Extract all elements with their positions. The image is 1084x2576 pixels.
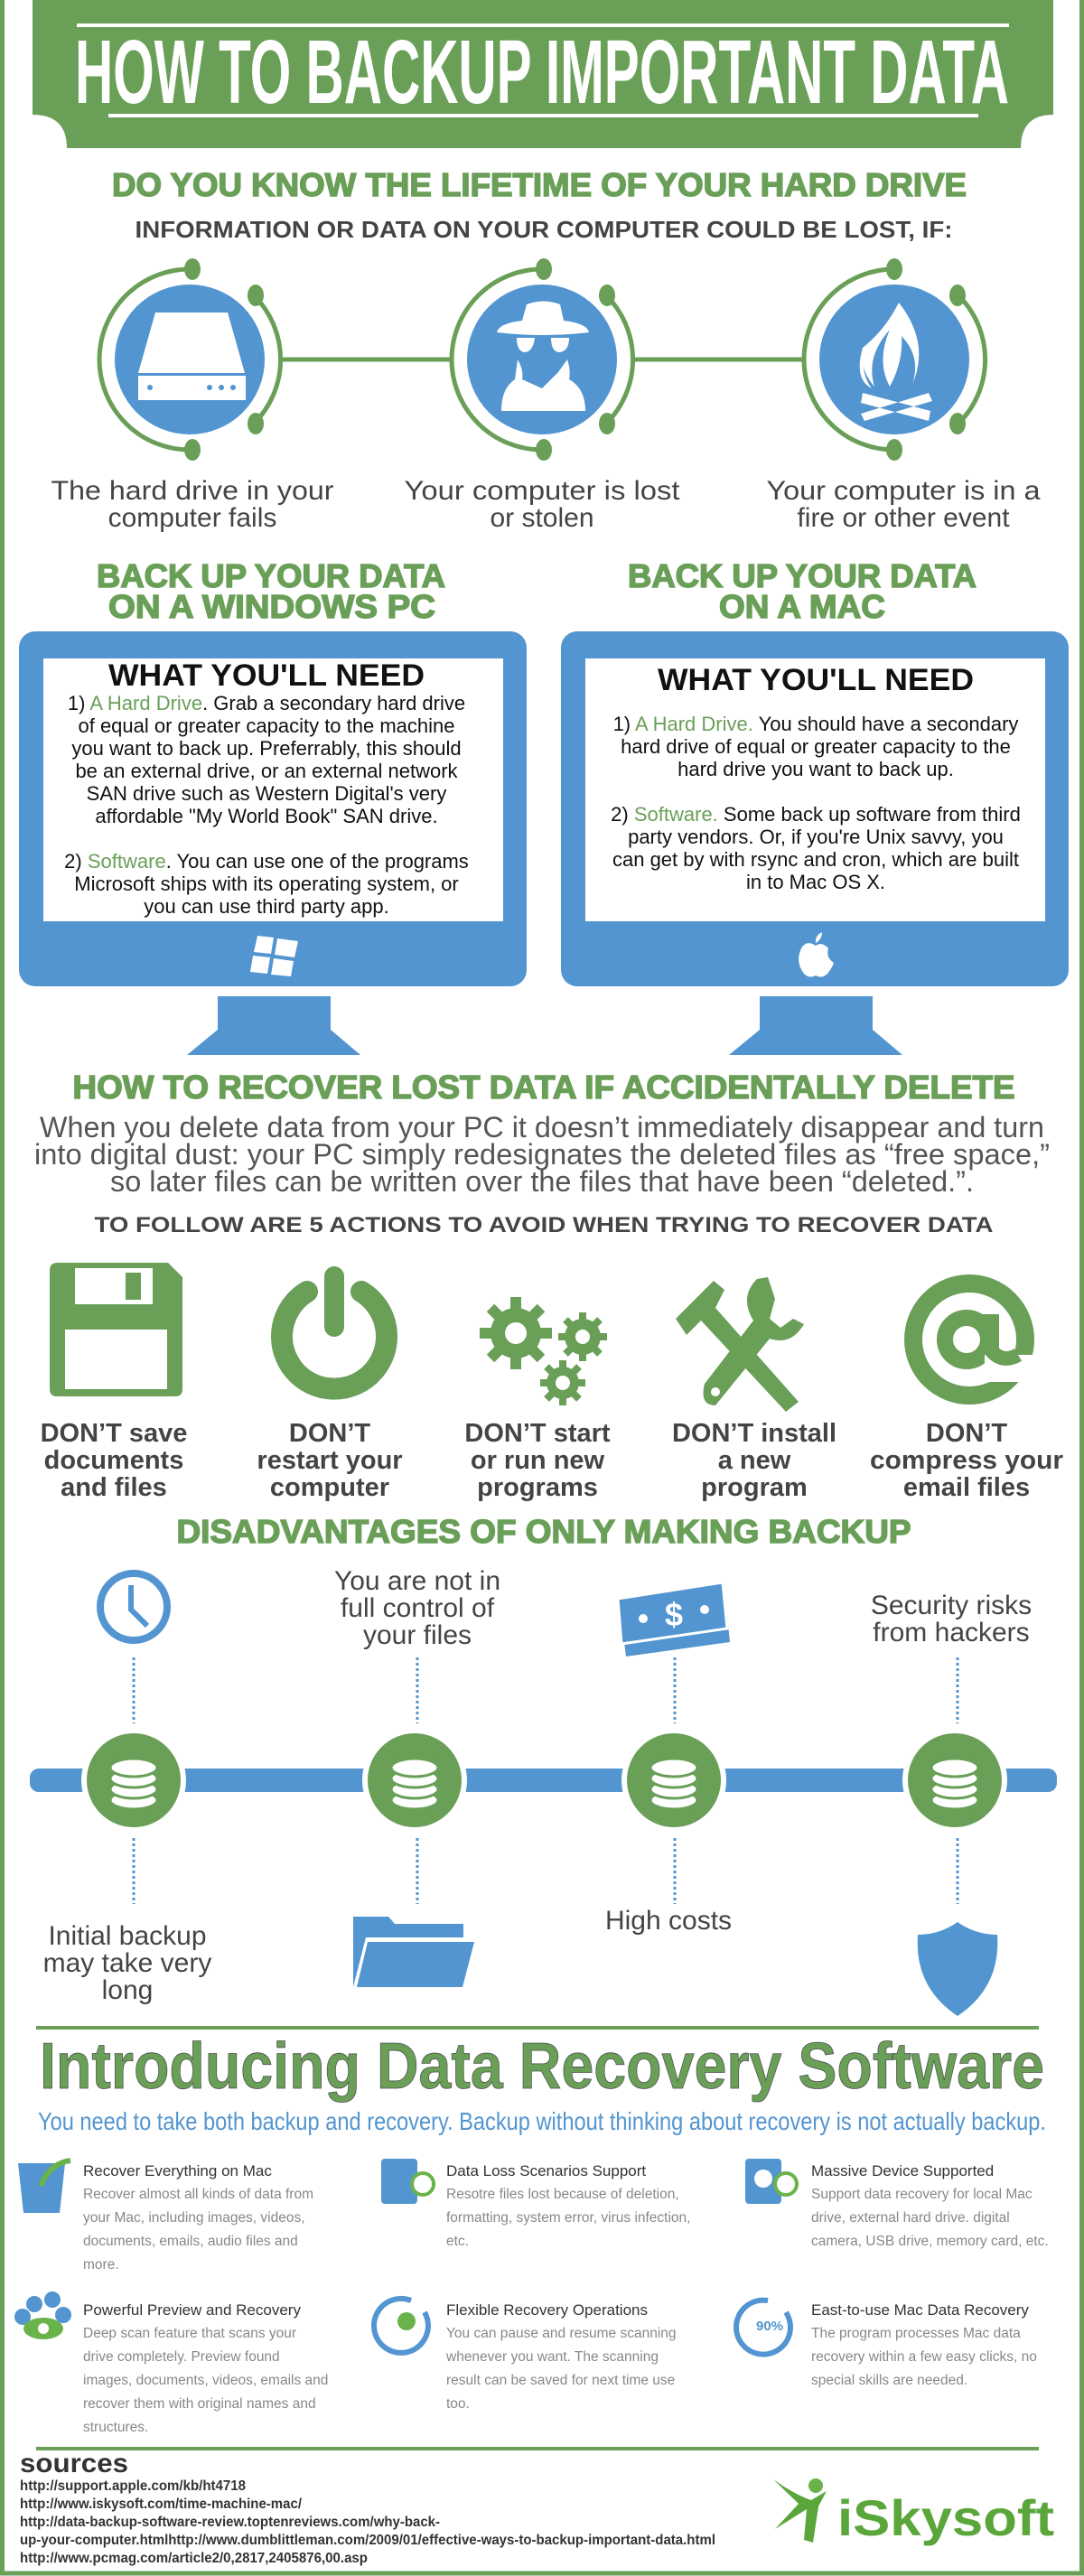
heading: disadvantages: DISADVANTAGES OF ONLY MAKING BACKUP: [177, 1513, 911, 1550]
icon: folder: [353, 1917, 474, 1987]
text: mac needs: [611, 663, 1021, 893]
icon: money: $: [665, 1596, 683, 1633]
labels: actions: DON’T: [926, 1419, 1007, 1448]
sources: http://www.pcmag.com/article2/0,2817,2405876,00.asp: [20, 2551, 368, 2566]
feature: recover everything: your Mac, including images, videos,: [83, 2210, 305, 2226]
labels: actions: [41, 1419, 1063, 1502]
feature: easy: [736, 2301, 1037, 2388]
feature: recover everything: documents, emails, audio files and: [83, 2234, 298, 2249]
feature: flexible: You can pause and resume scanning: [446, 2326, 677, 2341]
feature: preview: images, documents, videos, emails and: [83, 2373, 328, 2388]
heading: windows: [97, 557, 445, 625]
sources: [20, 2449, 715, 2566]
icon: power: [282, 1266, 387, 1389]
labels: actions: and files: [61, 1473, 167, 1502]
feature: preview: structures.: [83, 2420, 148, 2435]
sources: up-your-computer.htmlhttp://www.dumblittleman.com/2009/01/effective-ways-to-backup-important-data.html: [20, 2533, 715, 2548]
monitor: windows: [19, 631, 527, 1055]
labels: actions: compress your: [870, 1446, 1063, 1475]
labels: disadvantages: You are not in: [334, 1566, 500, 1596]
feature: data loss: Data Loss Scenarios Support: [446, 2162, 646, 2179]
labels: actions: a new: [718, 1446, 791, 1475]
title banner: [33, 0, 1053, 148]
labels: actions: DON’T start: [464, 1419, 611, 1448]
labels: actions: computer: [270, 1473, 389, 1502]
feature: data loss: Resotre files lost because of deletion,: [446, 2187, 679, 2202]
labels: actions: DON’T save: [41, 1419, 187, 1448]
text: windows needs: SAN drive such as Western Digital's very: [87, 782, 446, 805]
labels: disadvantages: Security risks: [871, 1591, 1032, 1620]
text: windows needs: [64, 658, 469, 918]
heading: mac: [628, 557, 977, 625]
paragraph: recover: into digital dust: your PC simply redesignates the deleted files as “free space,”: [34, 1138, 1050, 1171]
text: windows needs: you can use third party app.: [144, 895, 389, 918]
features: [14, 2159, 1049, 2435]
icon: clock: [100, 1573, 167, 1640]
icon: shield: [918, 1922, 997, 2016]
feature: easy: The program processes Mac data: [811, 2326, 1021, 2341]
text: mac needs: 2) Software. Some back up software from third: [611, 803, 1021, 826]
icons: database: [110, 1759, 978, 1809]
heading: windows: ON A WINDOWS PC: [108, 588, 435, 625]
text: windows needs: of equal or greater capacity to the machine: [78, 714, 455, 737]
timeline bar: [30, 1657, 1057, 1904]
icon: floppy: [50, 1263, 182, 1396]
text: mac needs: party vendors. Or, if you're Unix savvy, you: [628, 826, 1004, 848]
text: mac needs: 1) A Hard Drive. You should have a secondary: [613, 713, 1018, 735]
text: windows needs: Microsoft ships with its operating system, or: [74, 873, 459, 895]
feature: preview: Powerful Preview and Recovery: [83, 2301, 301, 2319]
feature: flexible: whenever you want. The scanning: [445, 2349, 659, 2365]
icon: fire circle: [804, 258, 986, 461]
labels: disadvantages: full control of: [341, 1593, 495, 1623]
feature: data loss: [381, 2159, 690, 2249]
labels: disadvantages: may take very: [43, 1948, 211, 1978]
heading: windows: BACK UP YOUR DATA: [97, 557, 445, 594]
text: windows needs: WHAT YOU'LL NEED: [108, 658, 425, 693]
feature: massive device: Massive Device Supported: [811, 2162, 994, 2179]
feature: data loss: formatting, system error, virus infection,: [446, 2210, 690, 2226]
logo: iSkysoft: [773, 2478, 1054, 2546]
icon: tools: [676, 1277, 804, 1412]
icon: apple logo: [799, 932, 834, 977]
feature: easy: East-to-use Mac Data Recovery: [811, 2301, 1029, 2319]
feature: massive device: drive, external hard drive. digital: [811, 2210, 1010, 2226]
feature: massive device: camera, USB drive, memory card, etc.: [811, 2234, 1049, 2249]
labels: disadvantages: long: [102, 1975, 153, 2005]
labels: actions: restart your: [257, 1446, 403, 1475]
heading: mac: ON A MAC: [719, 588, 885, 625]
labels: actions: email files: [903, 1473, 1030, 1502]
paragraph: recover: so later files can be written over the files that have been “deleted.”.: [110, 1165, 974, 1198]
text: mac needs: hard drive you want to back up.: [678, 758, 954, 780]
text: windows needs: 1) A Hard Drive. Grab a secondary hard drive: [68, 692, 465, 714]
feature: flexible: result can be saved for next time use: [446, 2373, 675, 2388]
captions: The hard drive in your: [51, 476, 334, 506]
heading: recover: HOW TO RECOVER LOST DATA IF ACCIDENTALLY DELETE: [72, 1069, 1015, 1106]
feature: easy: special skills are needed.: [811, 2373, 967, 2388]
feature: preview: [14, 2291, 328, 2435]
labels: disadvantages: your files: [363, 1620, 472, 1650]
labels: actions: DON’T: [289, 1419, 370, 1448]
sources: http://data-backup-software-review.toptenreviews.com/why-back-: [20, 2515, 440, 2530]
feature: recover everything: Recover almost all kinds of data from: [83, 2187, 313, 2202]
text: mac needs: in to Mac OS X.: [746, 871, 885, 893]
feature: recover everything: [18, 2161, 313, 2273]
feature: data loss: etc.: [446, 2234, 469, 2249]
icon: at sign: [913, 1283, 1039, 1395]
icon: money: [618, 1582, 730, 1657]
paragraph: recover: [34, 1111, 1050, 1198]
labels: disadvantages: [43, 1566, 1032, 2005]
text: windows needs: be an external drive, or an external network: [75, 760, 459, 782]
feature: preview: Deep scan feature that scans your: [83, 2326, 296, 2341]
labels: disadvantages: High costs: [605, 1906, 732, 1936]
feature: flexible: Flexible Recovery Operations: [446, 2301, 648, 2319]
text: windows needs: you want to back up. Preferrably, this should: [71, 737, 462, 760]
labels: actions: programs: [477, 1473, 598, 1502]
captions: or stolen: [490, 503, 594, 533]
labels: actions: DON’T install: [672, 1419, 836, 1448]
connector lines: [280, 358, 802, 361]
subheading: could be lost: INFORMATION OR DATA ON YOUR COMPUTER COULD BE LOST, IF:: [136, 216, 952, 243]
text: mac needs: can get by with rsync and cron, which are built: [612, 848, 1019, 871]
feature: massive device: [745, 2159, 1049, 2249]
icon: gears: [480, 1297, 607, 1405]
feature: easy: recovery within a few easy clicks, no: [811, 2349, 1037, 2365]
labels: actions: program: [701, 1473, 808, 1502]
heading: lifetime: DO YOU KNOW THE LIFETIME OF YOUR HARD DRIVE: [112, 166, 967, 203]
feature: massive device: Support data recovery for local Mac: [811, 2187, 1033, 2202]
sources: http://support.apple.com/kb/ht4718: [20, 2478, 246, 2494]
heading: mac: BACK UP YOUR DATA: [628, 557, 977, 594]
text: windows needs: 2) Software. You can use one of the programs: [64, 850, 469, 873]
labels: actions: or run new: [471, 1446, 605, 1475]
icon: hard drive circle: [99, 258, 281, 461]
labels: disadvantages: from hackers: [873, 1618, 1030, 1647]
paragraph: recover: When you delete data from your PC it doesn’t immediately disappear and turn: [40, 1111, 1044, 1143]
feature: recover everything: more.: [83, 2257, 119, 2273]
feature: flexible: too.: [446, 2396, 470, 2412]
captions: Your computer is lost: [405, 476, 680, 506]
text: mac needs: hard drive of equal or greater capacity to the: [621, 735, 1011, 758]
labels: actions: documents: [44, 1446, 183, 1475]
text: windows needs: affordable "My World Book" SAN drive.: [95, 805, 438, 827]
logo: iSkysoft: iSkysoft: [837, 2489, 1054, 2546]
feature: flexible: [374, 2299, 677, 2412]
icon: windows logo: [250, 936, 298, 976]
captions: Your computer is in a: [766, 476, 1041, 506]
feature: easy: 90%: [756, 2319, 783, 2334]
captions: fire or other event: [797, 503, 1010, 533]
feature: preview: drive completely. Preview found: [83, 2349, 280, 2365]
sources: http://www.iskysoft.com/time-machine-mac/: [20, 2497, 303, 2512]
captions: [51, 476, 1041, 533]
icon: thief circle: [452, 258, 633, 461]
captions: computer fails: [108, 503, 276, 533]
monitor: mac: [561, 631, 1069, 1055]
subheading: 5 actions: TO FOLLOW ARE 5 ACTIONS TO AVOID WHEN TRYING TO RECOVER DATA: [94, 1213, 994, 1237]
labels: disadvantages: Initial backup: [48, 1921, 207, 1951]
text: mac needs: WHAT YOU'LL NEED: [658, 663, 974, 697]
feature: preview: recover them with original names and: [83, 2396, 316, 2412]
feature: recover everything: Recover Everything on Mac: [83, 2162, 272, 2179]
sources: sources: [20, 2449, 128, 2478]
